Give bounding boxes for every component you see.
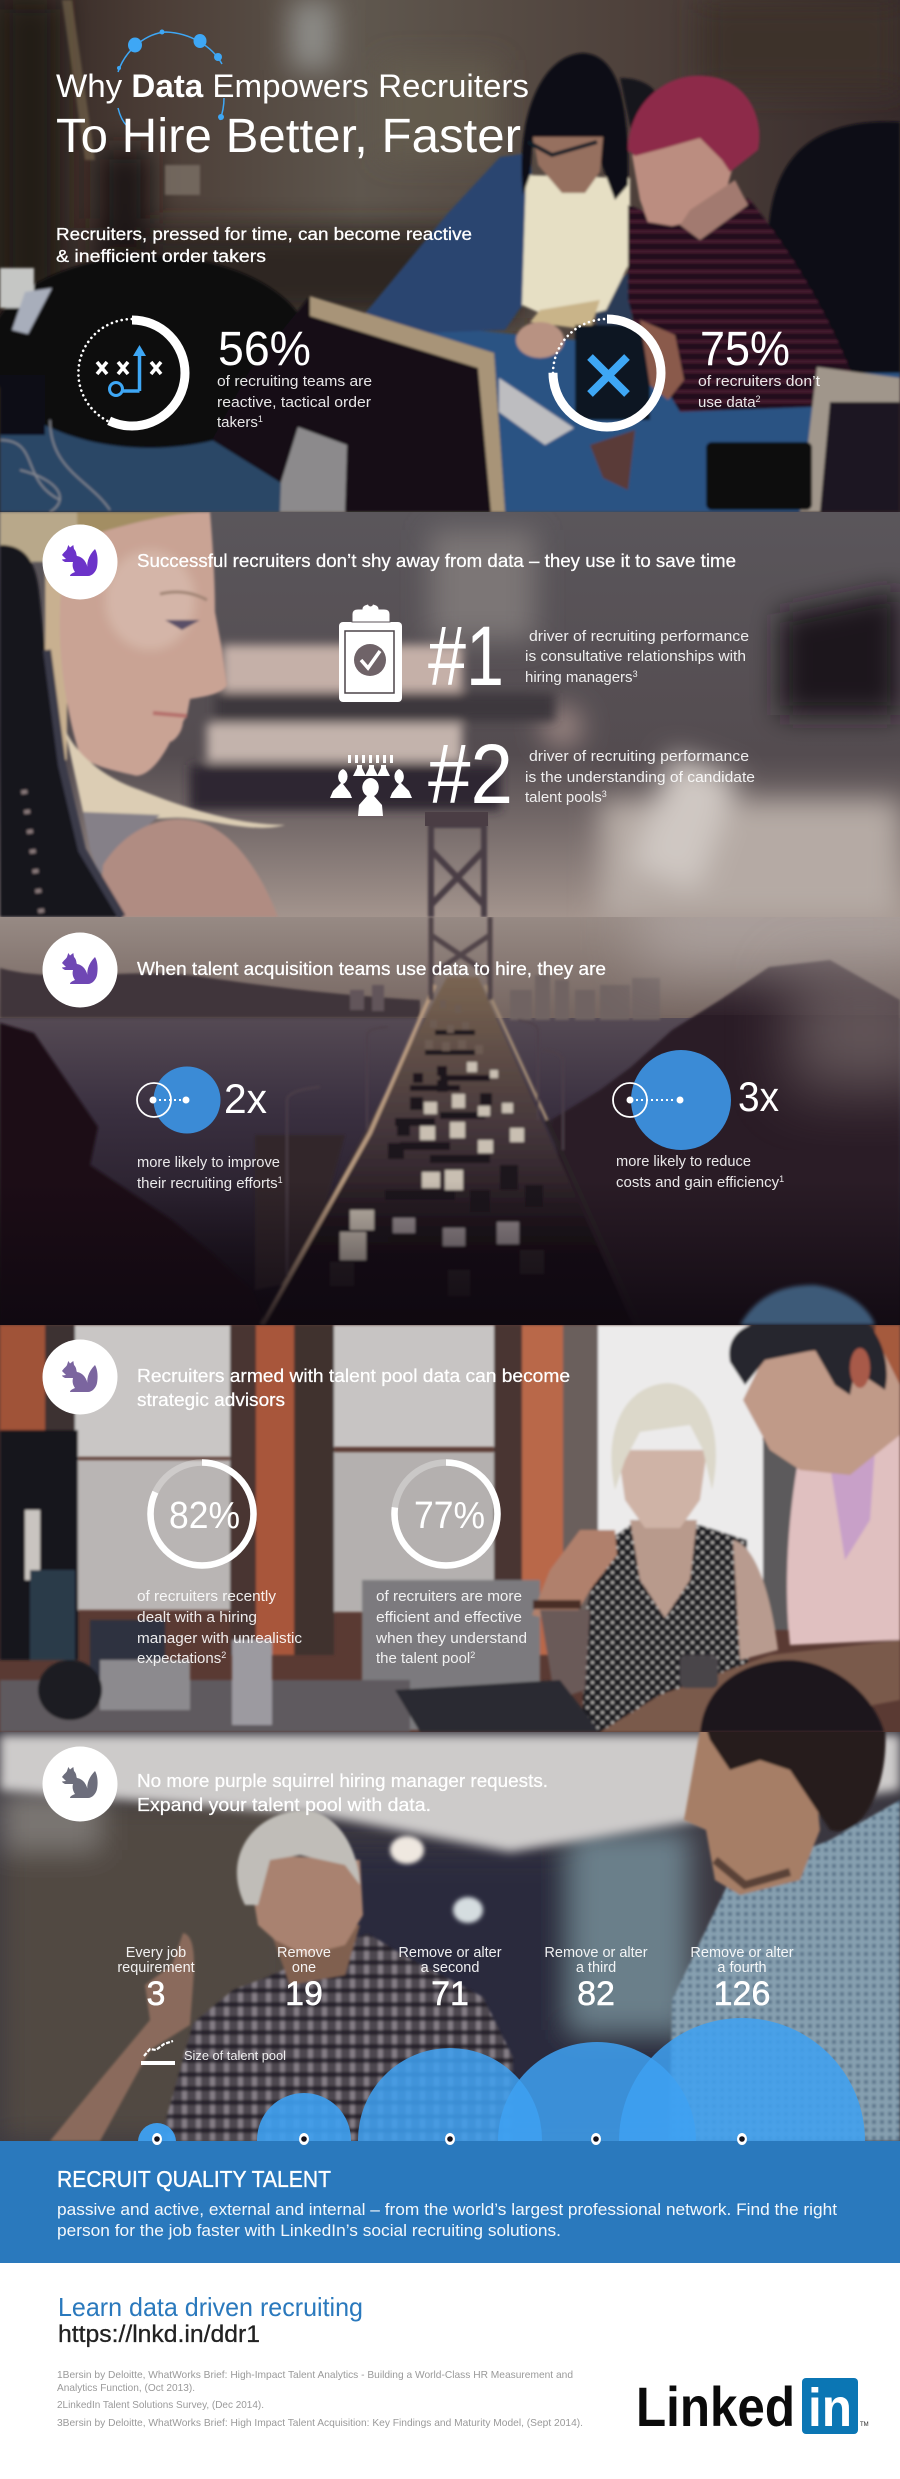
panel: talent acquisition teams using data	[0, 880, 900, 1325]
column labels: 82	[577, 1975, 615, 2013]
footnotes	[57, 2369, 583, 2429]
stat text: 1	[258, 414, 263, 424]
panel: successful recruiters use data	[0, 512, 900, 920]
stat: 3x: costs and gain efficiency	[616, 1174, 779, 1191]
hero background photo: two women at a desk	[0, 0, 900, 512]
stat text: takers	[217, 414, 258, 431]
column labels: Remove or alter	[544, 1945, 648, 1961]
band text: passive and active, external and internal – from the world’s largest professional network. Find the right	[57, 2200, 837, 2219]
stat text: 77 percent: 2	[470, 1650, 475, 1660]
rank #1: driver of recruiting performance	[529, 628, 749, 645]
section icon: squirrel badge	[42, 1746, 118, 1822]
intro text: & inefficient order takers	[56, 246, 266, 266]
background photo: office with brick and windows	[0, 1320, 900, 1732]
road	[274, 976, 612, 1310]
stat: 3x: 3x	[738, 1073, 779, 1120]
hair	[0, 512, 78, 562]
band text: person for the job faster with LinkedIn’s social recruiting solutions.	[57, 2221, 561, 2240]
keyboard	[499, 378, 574, 445]
column labels: Remove	[277, 1945, 331, 1961]
hair of woman 1	[522, 53, 628, 200]
blouse	[522, 175, 630, 322]
donut stat: 82 percent	[150, 1462, 254, 1566]
heading: No more purple squirrel hiring manager requests.	[137, 1771, 548, 1791]
rank #1: is consultative relationships with	[525, 648, 746, 665]
legend: size of talent pool: Size of talent pool	[184, 2048, 286, 2063]
lamp	[0, 256, 312, 448]
chair	[768, 122, 900, 373]
donut stat: 77 percent	[394, 1462, 498, 1566]
stat text: 77 percent: efficient and effective	[376, 1609, 522, 1626]
dark fade	[0, 1180, 900, 1325]
hands	[516, 322, 564, 358]
column labels: 71	[431, 1975, 469, 2013]
column labels: 126	[714, 1975, 770, 2013]
stat: 2x: more likely to improve	[137, 1154, 280, 1171]
mist upper right	[640, 880, 900, 970]
column labels: a second	[421, 1960, 479, 1976]
stat: 2x: their recruiting efforts	[137, 1175, 278, 1192]
heading: strategic advisors	[137, 1390, 285, 1410]
column labels: one	[292, 1960, 316, 1976]
chart: talent pool size domes	[117, 1945, 865, 2264]
stat text: 77 percent: the talent pool	[376, 1650, 470, 1667]
hair	[237, 1810, 360, 1905]
background photo: blonde woman in an office	[0, 512, 900, 920]
cars	[340, 1062, 524, 1260]
hair of woman 2	[628, 76, 759, 172]
dress	[83, 812, 160, 875]
cables	[0, 420, 110, 512]
car shadows	[385, 1028, 542, 1211]
section icon: squirrel badge	[42, 1340, 118, 1414]
panel: strategic advisors	[0, 1320, 900, 1732]
column labels: a fourth	[717, 1960, 767, 1976]
older man shirt	[160, 1933, 513, 2141]
decorative orbit around title	[117, 30, 224, 126]
donut stat: 56 percent	[78, 319, 372, 431]
legend: size of talent pool	[141, 2041, 286, 2065]
column labels: 19	[285, 1975, 323, 2013]
rank #2: talent pools	[525, 789, 602, 806]
LinkedIn logo: Linked	[636, 2375, 795, 2438]
stat text: 75%	[700, 323, 790, 376]
column labels: Remove or alter	[398, 1945, 502, 1961]
desk	[0, 425, 900, 512]
column labels	[117, 1945, 794, 2013]
stat: 2x: 1	[278, 1175, 283, 1185]
column labels: Remove or alter	[690, 1945, 794, 1961]
stat text: 77 percent	[375, 1588, 527, 1667]
rank #2: #2	[428, 727, 513, 821]
stat text: 2	[756, 394, 761, 404]
man	[787, 1430, 900, 1645]
hand and arm	[50, 1933, 194, 2141]
heading: When talent acquisition teams use data to hire, they are	[137, 959, 606, 979]
right monitor	[800, 367, 900, 512]
heading	[137, 1771, 548, 1815]
rank #1: hiring managers	[525, 669, 633, 686]
top of woman 2	[628, 190, 863, 412]
stat text: of recruiters don’t	[698, 373, 821, 390]
background photo: two men talking	[0, 1725, 900, 2141]
rank #2: 3	[602, 789, 607, 799]
lower hair	[65, 730, 285, 828]
face	[60, 512, 227, 776]
chair	[0, 545, 122, 917]
stat: 2x	[137, 1066, 283, 1192]
neck and face	[270, 1925, 360, 1985]
rank #1: #1	[428, 609, 504, 703]
panel: hero, recruiters pressed for time	[0, 0, 900, 512]
timeline dots	[152, 2133, 747, 2145]
intro text: Recruiters, pressed for time, can become reactive	[56, 224, 472, 244]
tower	[431, 917, 490, 1000]
icon: blue X	[590, 357, 627, 394]
heading: Recruiters armed with talent pool data can become	[137, 1366, 570, 1386]
stat text: 82 percent: manager with unrealistic	[137, 1630, 303, 1647]
footnotes: Analytics Function, (Oct 2013).	[57, 2382, 195, 2394]
call to action: https://lnkd.in/ddr1	[58, 2321, 260, 2348]
LinkedIn logo: in	[808, 2378, 852, 2438]
title: To Hire Better, Faster	[56, 110, 521, 163]
heading: Successful recruiters don’t shy away from data – they use it to save time	[137, 551, 736, 571]
rank #2	[428, 727, 755, 821]
head of man in foreground	[700, 1660, 884, 1732]
face and neck of woman 2	[632, 135, 732, 226]
column labels: 3	[147, 1975, 165, 2013]
pier	[255, 1135, 345, 1290]
LinkedIn logo: TM	[860, 2422, 869, 2428]
call to action: Learn data driven recruiting	[58, 2292, 363, 2322]
arm	[600, 1640, 900, 1732]
trees right	[550, 959, 900, 1278]
title	[56, 68, 529, 163]
stat text: reactive, tactical order	[217, 394, 371, 411]
rank #1	[428, 609, 749, 703]
section icon: squirrel badge	[42, 524, 118, 600]
stat text: 82 percent	[137, 1588, 303, 1667]
stat: 3x: more likely to reduce	[616, 1153, 751, 1170]
rank #2: driver of recruiting performance	[529, 748, 749, 765]
stat: 3x	[613, 1050, 784, 1191]
laptop	[395, 1680, 600, 1732]
rank #2: is the understanding of candidate	[525, 769, 755, 786]
heading	[137, 1366, 570, 1410]
stat text: 77 percent: of recruiters are more	[376, 1588, 522, 1605]
donut stat: 75 percent	[553, 319, 821, 427]
band text	[57, 2200, 837, 2240]
icon: clipboard	[339, 602, 402, 702]
woman	[582, 1525, 750, 1732]
footnotes: 2LinkedIn Talent Solutions Survey, (Dec 2014).	[57, 2399, 264, 2411]
panel: recruit quality talent band	[0, 2133, 900, 2263]
call to action	[58, 2292, 363, 2348]
stat text: of recruiting teams are	[217, 373, 372, 390]
stat text: 77 percent: when they understand	[375, 1630, 527, 1647]
younger man	[670, 1800, 900, 2141]
stat text: 82 percent: of recruiters recently	[137, 1588, 276, 1605]
column labels: requirement	[117, 1960, 195, 1976]
background photo: bay bridge	[0, 880, 900, 1325]
column labels: a third	[576, 1960, 616, 1976]
stat text	[217, 323, 372, 431]
stat text: 56%	[218, 323, 311, 376]
band heading: RECRUIT QUALITY TALENT	[57, 2166, 331, 2192]
stat: 2x: 2x	[224, 1075, 267, 1122]
donut stat: 77 percent: 77%	[414, 1495, 485, 1537]
column labels: Every job	[126, 1945, 186, 1961]
big monitor	[212, 296, 505, 512]
stat text: 82 percent: dealt with a hiring	[137, 1609, 257, 1626]
trees left	[0, 1023, 265, 1325]
icon: play diagram	[97, 345, 161, 396]
stat text: 82 percent: expectations	[137, 1650, 221, 1667]
icon: talent pool people	[330, 755, 412, 816]
footnotes: 1Bersin by Deloitte, WhatWorks Brief: High-Impact Talent Analytics - Building a World-Class HR Measurement and	[57, 2369, 573, 2381]
shoulder	[100, 819, 278, 917]
stat: 3x: 1	[779, 1174, 784, 1184]
rank #1: 3	[633, 669, 638, 679]
title: Why Data Empowers Recruiters	[56, 68, 529, 104]
stat text: use data	[698, 394, 756, 411]
donut stat: 82 percent: 82%	[169, 1495, 240, 1537]
heading: Expand your talent pool with data.	[137, 1795, 431, 1815]
footnotes: 3Bersin by Deloitte, WhatWorks Brief: High Impact Talent Acquisition: Key Findings and Maturity Model, (Sept 2014).	[57, 2417, 583, 2429]
panel: no more purple squirrel requests	[0, 1725, 900, 2264]
stat text: 82 percent: 2	[221, 1650, 226, 1660]
panel: footer	[0, 2263, 900, 2479]
stat text	[698, 323, 821, 411]
lamps	[287, 1020, 563, 1277]
section icon: squirrel badge	[42, 932, 118, 1008]
jacket	[362, 153, 540, 335]
